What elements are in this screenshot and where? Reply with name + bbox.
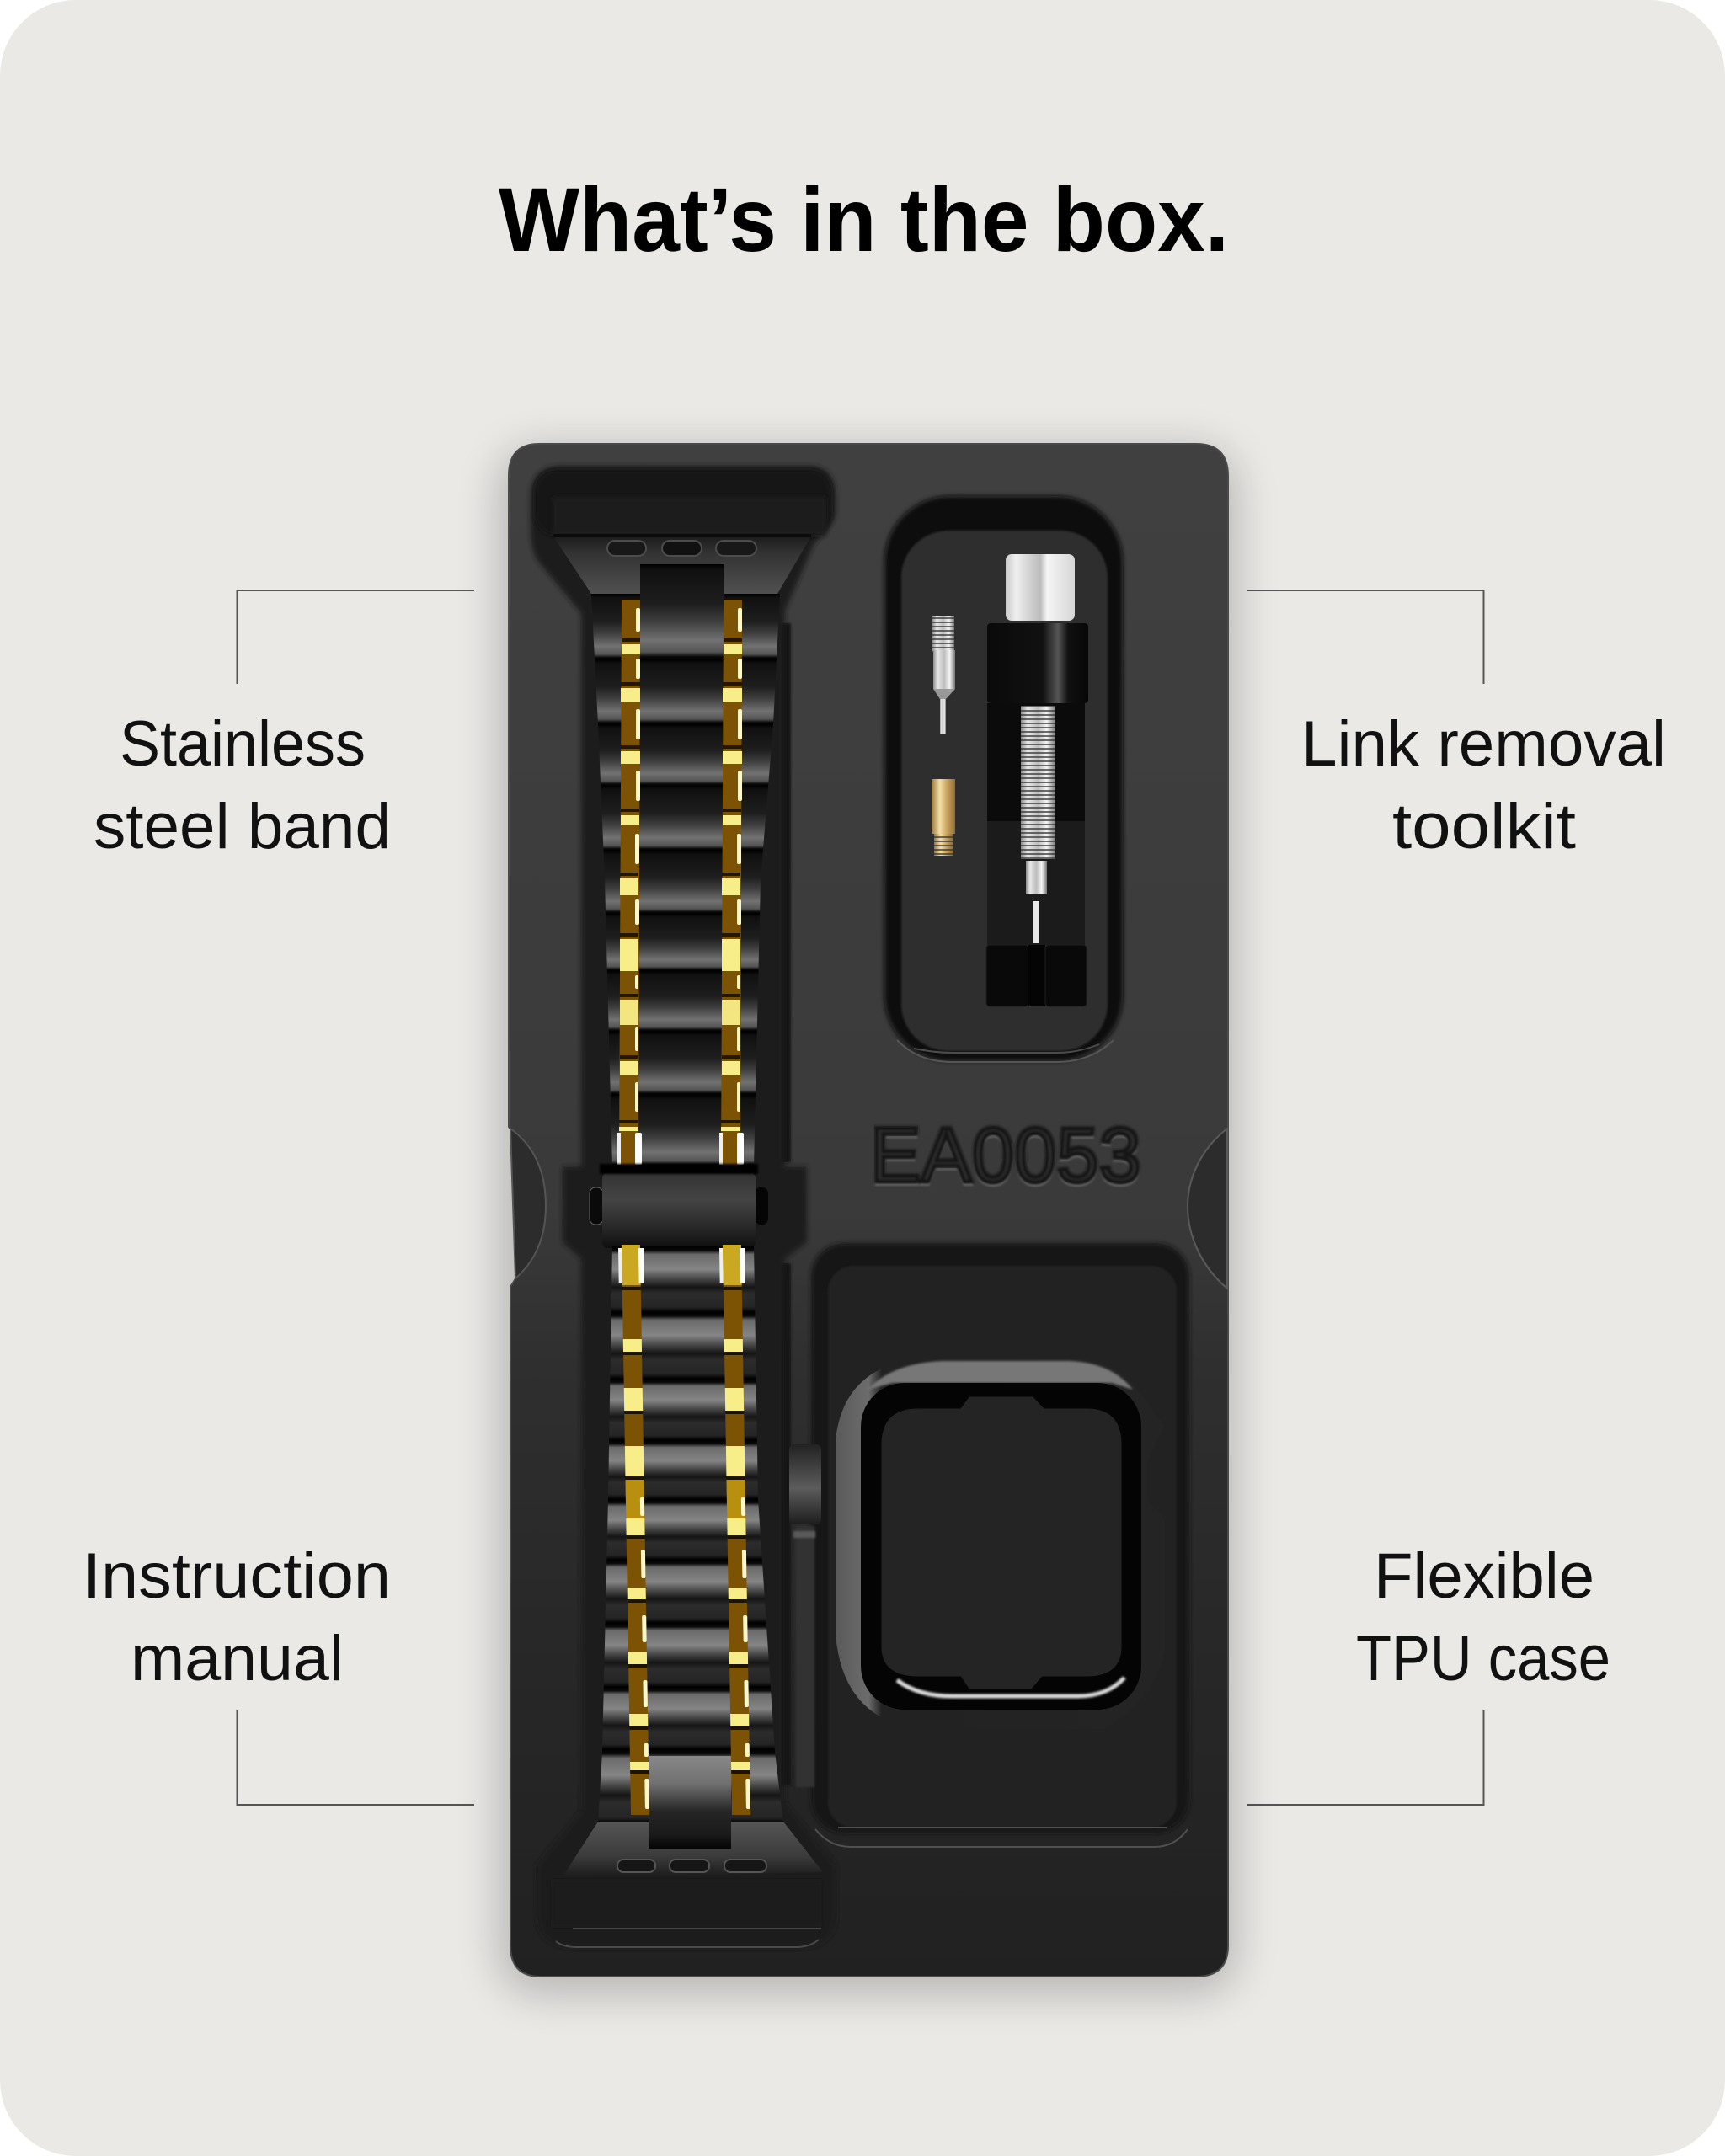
connector: top right: [1247, 590, 1484, 684]
lower left gold strip: [618, 1245, 653, 1815]
label: flexible TPU case: TPU case: [1356, 1623, 1610, 1694]
tray body: [509, 444, 1228, 1977]
connector: top left: [238, 590, 474, 684]
brass bit: [932, 779, 955, 856]
tool recess: [884, 496, 1123, 1062]
channel right edge lower: [782, 1263, 791, 1785]
label: instruction manual: Instruction: [83, 1540, 391, 1612]
bottom recess floor: [552, 1880, 821, 1927]
embossed code: EA0053: [870, 1115, 1141, 1201]
upper links: [591, 594, 780, 1163]
link remover tool: [986, 554, 1088, 1006]
connector: bottom right: [1247, 1710, 1484, 1805]
embossed code: EA0053: [870, 1113, 1141, 1198]
connector: bottom left: [238, 1710, 474, 1805]
tray shadow: [497, 446, 1238, 1996]
left notch arc: [510, 1129, 546, 1278]
flexible TPU case: [836, 1359, 1165, 1729]
collar: [1026, 861, 1047, 894]
divider ridge between band and case: [789, 1444, 821, 1787]
upper right gold strip: [719, 600, 744, 1166]
small steel pin: [932, 616, 955, 734]
top centre link: [640, 564, 724, 659]
holder body: [987, 703, 1085, 821]
bottom recess lip: [573, 1928, 821, 1929]
link removal toolkit: [932, 554, 1088, 1006]
label: stainless steel band: Stainless: [120, 708, 366, 780]
upper left gold strip: [617, 600, 642, 1166]
case gloss ring: [861, 1383, 1141, 1710]
textured holder: [987, 821, 1085, 945]
title: What’s in the box.: [499, 168, 1229, 270]
label: flexible TPU case: Flexible: [1374, 1540, 1594, 1612]
threaded screw: [1021, 706, 1055, 859]
case outer shell: [836, 1359, 1165, 1729]
bottom lug: [562, 1822, 823, 1878]
bottom recess outer rim: [556, 1940, 819, 1947]
feet: [986, 945, 1087, 1006]
lower links: [598, 1246, 783, 1822]
punch pin: [1033, 901, 1039, 943]
stainless steel band: [553, 536, 823, 1878]
case inner left reflection: [871, 1457, 874, 1625]
black cap: [987, 623, 1088, 703]
label: flexible TPU case: [1356, 1540, 1610, 1694]
label: instruction manual: manual: [131, 1623, 344, 1694]
clasp: [590, 1164, 768, 1248]
top lug: [553, 536, 811, 594]
case inner window: [880, 1396, 1123, 1690]
knob: [1006, 554, 1075, 621]
right notch arc: [1188, 1129, 1227, 1289]
band recess and channel: [531, 466, 836, 1947]
case recess: [811, 1243, 1189, 1847]
bottom centre link: [649, 1756, 731, 1849]
label: stainless steel band: steel band: [93, 791, 391, 862]
channel right edge: [782, 623, 791, 1162]
label: link removal toolkit: Link removal: [1301, 708, 1666, 780]
top recess dark band: [535, 470, 831, 536]
top recess inner ledge: [553, 497, 826, 536]
right gloss: [1130, 1463, 1135, 1646]
label: instruction manual: [83, 1540, 391, 1694]
lower right gold strip: [719, 1245, 754, 1815]
packaging tray: [509, 444, 1228, 1977]
label: stainless steel band: [93, 708, 391, 862]
label: link removal toolkit: toolkit: [1392, 791, 1576, 862]
label: link removal toolkit: [1301, 708, 1666, 862]
case top highlight: [868, 1361, 1133, 1390]
bottom gloss: [897, 1678, 1124, 1696]
